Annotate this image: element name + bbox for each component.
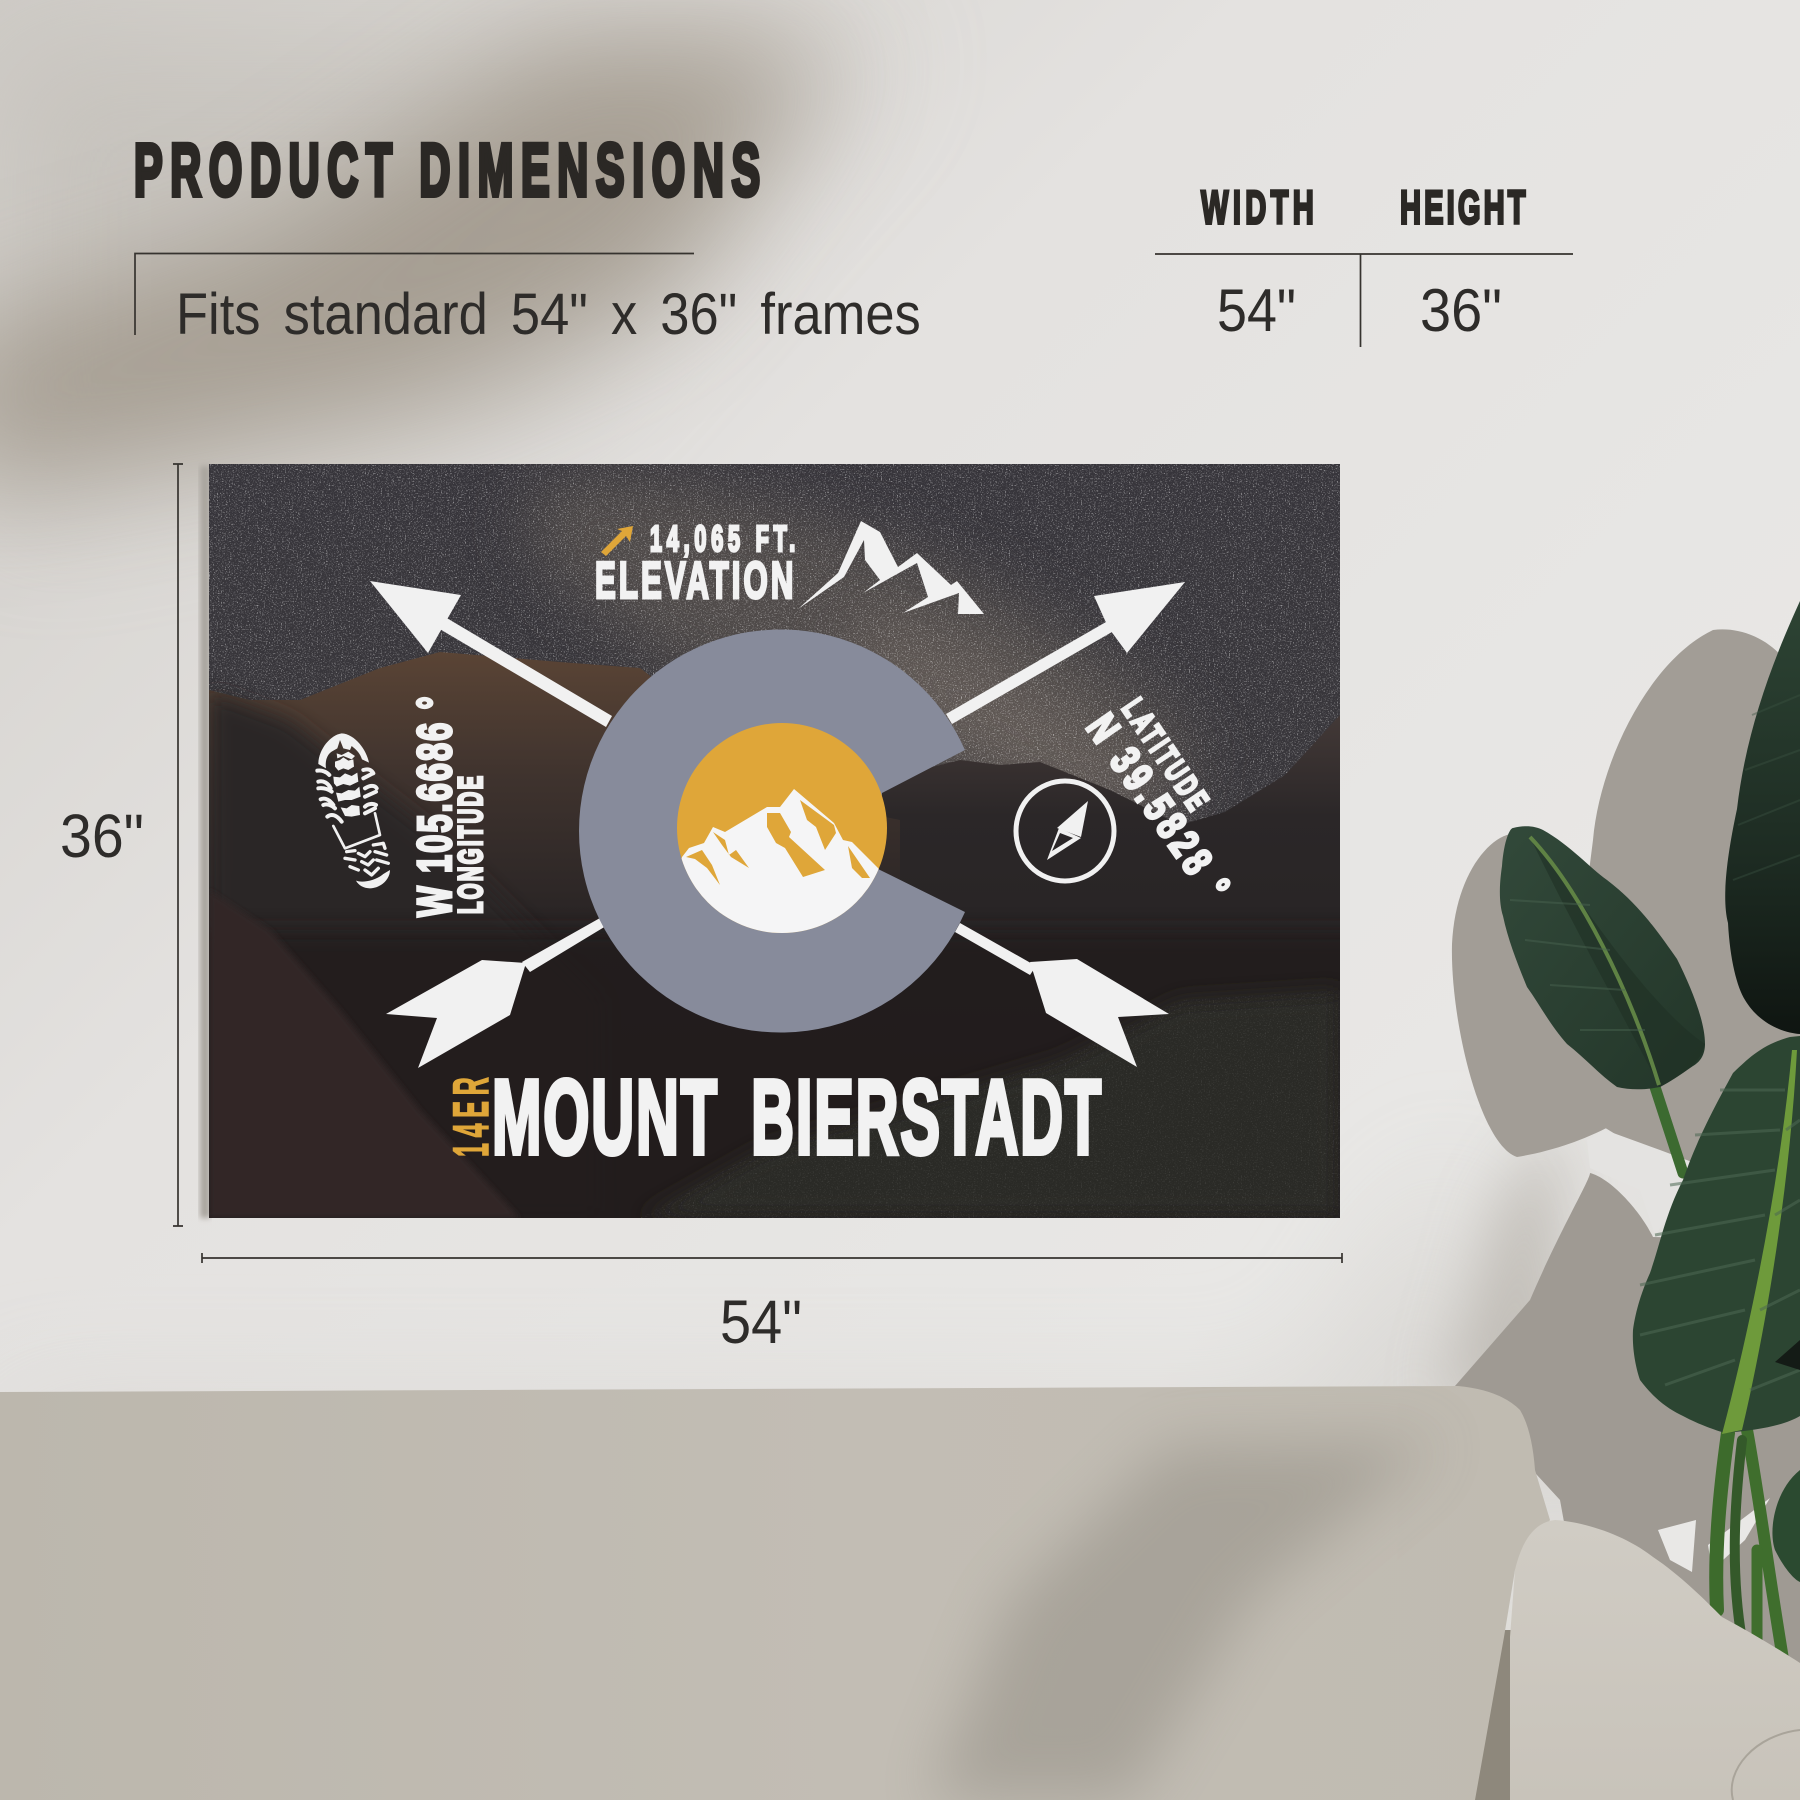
longitude block xyxy=(408,694,489,917)
size table xyxy=(1155,183,1573,347)
colorado C emblem xyxy=(579,629,965,1032)
title: product dimensions: PRODUCT DIMENSIONS xyxy=(134,128,768,211)
icon: boot print xyxy=(317,733,390,888)
snow mountain xyxy=(660,789,900,940)
14er tag: 14ER xyxy=(444,1071,499,1157)
elevation block xyxy=(595,519,800,610)
left leaf xyxy=(1500,826,1705,1089)
width label: 54" xyxy=(720,1288,802,1356)
table value: height: 36" xyxy=(1420,277,1502,344)
poster xyxy=(198,464,1340,1221)
longitude label: LONGITUDE xyxy=(452,774,489,914)
bracket: fits note xyxy=(135,254,694,335)
arrow: lower left xyxy=(386,918,606,1068)
elevation value: 14,065 FT. xyxy=(650,519,800,559)
dimension line: height xyxy=(60,464,183,1226)
sofa arm xyxy=(1510,1520,1800,1800)
mountain facets xyxy=(686,800,870,885)
icon: elevation arrow xyxy=(601,526,633,556)
mountain name xyxy=(444,1058,1103,1177)
elevation label: ELEVATION xyxy=(595,552,796,610)
plant shadows on wall xyxy=(1452,629,1800,1720)
height label: 36" xyxy=(60,802,144,870)
icon: mountain outline xyxy=(798,521,984,614)
lower right leaf xyxy=(1633,1036,1800,1434)
stems xyxy=(1655,1087,1790,1700)
icon: compass xyxy=(1016,781,1114,881)
latitude label: LATITUDE xyxy=(1115,692,1217,820)
sun disc xyxy=(677,723,887,933)
latitude value: N 39.5828 ° xyxy=(1078,705,1242,912)
small lower leaf xyxy=(1772,1470,1800,1582)
latitude block xyxy=(1078,692,1242,912)
poster background photo xyxy=(150,412,1400,1280)
text: frame fit note: Fits standard 54" x 36" frames xyxy=(176,282,921,347)
dimension line: width xyxy=(202,1253,1342,1356)
table heading: height: HEIGHT xyxy=(1400,183,1529,234)
arrow: lower right xyxy=(955,923,1169,1067)
arrow: upper right xyxy=(946,582,1185,724)
longitude value: W 105.6686 ° xyxy=(408,694,462,917)
sofa back xyxy=(0,1386,1550,1800)
table heading: width: WIDTH xyxy=(1201,183,1318,234)
arrow: upper left xyxy=(370,581,612,727)
plant xyxy=(1500,601,1800,1700)
wall background xyxy=(0,0,1586,1521)
table value: width: 54" xyxy=(1217,277,1296,344)
C ring xyxy=(579,629,965,1032)
upper right leaf xyxy=(1725,601,1800,1034)
mountain title: MOUNT BIERSTADT xyxy=(492,1058,1103,1177)
